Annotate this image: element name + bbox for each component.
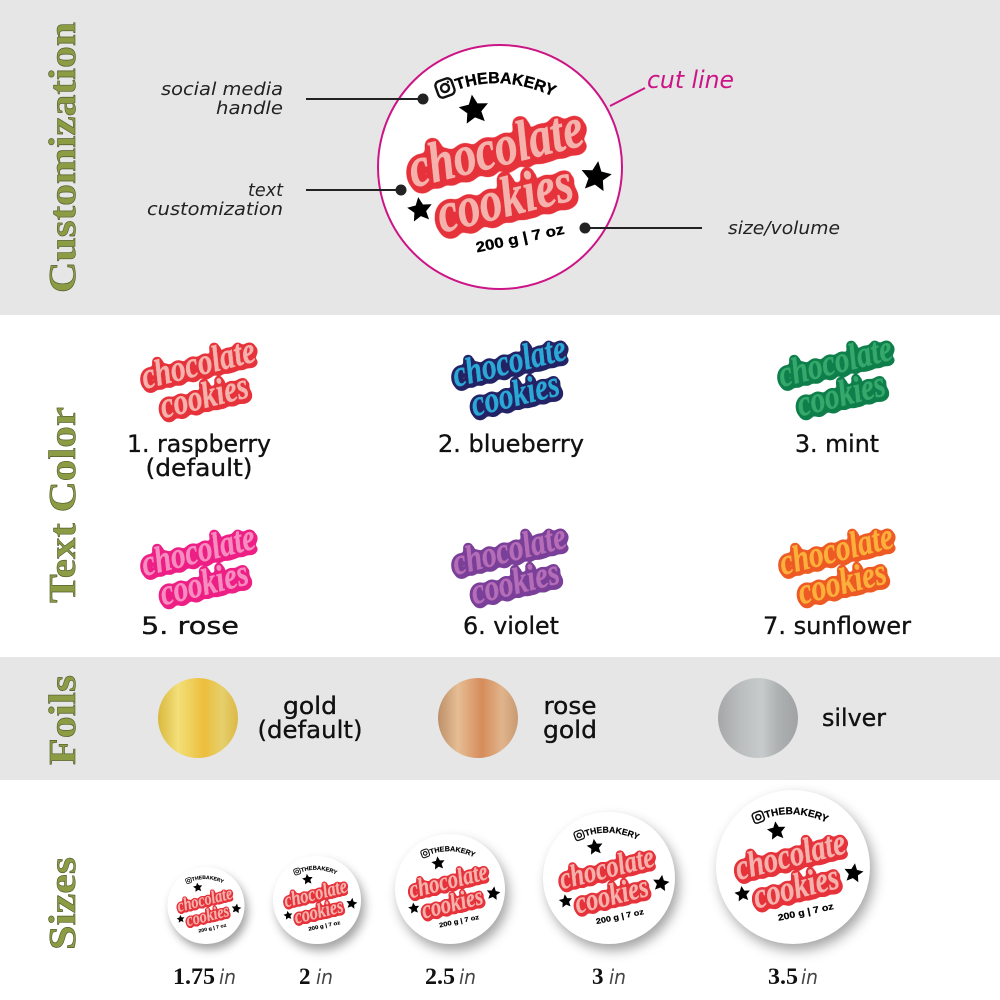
size label: 1.75 in: in (219, 965, 236, 989)
sticker: 2 in: THEBAKERY (300, 866, 338, 874)
foil: rose gold: rose (544, 692, 596, 720)
sticker: 1.75 in: 200 g | 7 oz (198, 922, 228, 933)
heading: Text Color: Text Color (42, 407, 84, 603)
callout: text customization: text (248, 181, 284, 201)
sticker: 2 in: cookies (292, 895, 346, 929)
size label: 3 in: 3 (592, 964, 604, 989)
sticker: 2.5 in (392, 834, 516, 958)
foil: gold (158, 678, 362, 758)
swatch: violet: chocolate (448, 516, 570, 584)
foil: silver (718, 678, 886, 758)
size label: 2 in (299, 964, 333, 989)
sticker: 1.75 in: cookies (184, 900, 231, 930)
sticker: 3.5 in: chocolate (731, 822, 849, 888)
swatch: violet (448, 516, 570, 640)
swatch: rose: cookies (156, 553, 253, 614)
panel: text color (42, 328, 911, 640)
swatch: sunflower (763, 516, 911, 640)
foil: rose gold: gold (543, 716, 597, 744)
callout: text customization: customization (147, 200, 283, 220)
handle text (457, 83, 554, 97)
swatch: raspberry (127, 330, 271, 482)
swatch: sunflower: cookies (794, 552, 891, 613)
sticker: 3.5 in: cookies (749, 856, 843, 916)
swatch: sunflower: chocolate (775, 516, 897, 584)
sticker: 2 in: 200 g | 7 oz (308, 920, 341, 933)
swatch: violet: 6. violet (463, 612, 559, 640)
foil: silver: silver (822, 704, 886, 732)
sticker: 2.5 in: 200 g | 7 oz (439, 914, 481, 929)
size label: 3.5 in: in (801, 965, 818, 989)
size label: 3 in (592, 964, 626, 989)
swatch: blueberry (438, 328, 584, 458)
heading: Sizes: Sizes (42, 857, 84, 950)
callout: text customization (147, 181, 406, 220)
heading: Customization: Customization (42, 22, 84, 293)
size label: 3.5 in: 3.5 (768, 964, 798, 989)
stars (406, 93, 613, 222)
size label: 3.5 in (768, 964, 818, 989)
heading: Foils: Foils (42, 675, 84, 765)
sticker: 3 in: cookies (571, 869, 652, 920)
sticker: 2.5 in: THEBAKERY (429, 846, 476, 857)
swatch: raspberry: 1. raspberry (127, 430, 271, 458)
swatch: blueberry: chocolate (448, 328, 570, 396)
callout: cut line (610, 66, 734, 106)
sticker: 3.5 in: THEBAKERY (764, 807, 830, 822)
panel: customization (0, 0, 1000, 315)
sticker: 1.75 in (165, 868, 254, 955)
label diagram: THEBAKERY (454, 72, 558, 96)
panel: sizes (42, 788, 882, 989)
sticker: 1.75 in: chocolate (175, 883, 234, 916)
sticker: 2.5 in: cookies (418, 881, 486, 924)
sticker: 1.75 in: THEBAKERY (191, 876, 224, 883)
callout: size/volume: size/volume (728, 219, 840, 239)
panel: foils (0, 657, 1000, 780)
sticker: 3 in: chocolate (556, 840, 657, 896)
product name lockup: cookies (430, 151, 579, 245)
sticker: 3 in: 200 g | 7 oz (595, 907, 645, 926)
icon: instagram (434, 77, 456, 99)
swatch: blueberry: cookies (467, 364, 564, 425)
callout: social media handle (161, 80, 428, 119)
swatch: mint (774, 328, 896, 458)
size label: 1.75 in: 1.75 (173, 964, 215, 989)
swatch: rose: 5. rose (141, 612, 239, 640)
sticker: 3.5 in (712, 788, 882, 958)
swatch: mint: cookies (793, 364, 890, 425)
product name lockup (402, 96, 590, 245)
foil: gold: (default) (258, 716, 362, 744)
size label: 2 in: 2 (299, 964, 310, 989)
swatch: mint: 3. mint (795, 430, 879, 458)
callout: social media handle: social media (161, 80, 283, 100)
swatch: raspberry: chocolate (137, 330, 259, 398)
swatch: rose: chocolate (137, 517, 259, 585)
swatch: raspberry: cookies (156, 366, 253, 427)
size label: 2.5 in: 2.5 (425, 964, 455, 989)
foil: rose gold (438, 678, 597, 758)
size label: 2.5 in: in (459, 965, 476, 989)
callout: size/volume (580, 219, 840, 239)
swatch: violet: cookies (467, 552, 564, 613)
size label: 2.5 in (425, 964, 476, 989)
callout: social media handle: handle (216, 99, 283, 119)
swatch: rose (137, 517, 259, 640)
swatch: raspberry: (default) (146, 454, 252, 482)
callout: cut line: cut line (647, 66, 734, 94)
size label: 2 in: in (316, 965, 333, 989)
size label: 1.75 in (173, 964, 236, 989)
swatch: sunflower: 7. sunflower (763, 612, 911, 640)
sticker: 2.5 in: chocolate (405, 857, 490, 904)
sticker: 2 in (270, 856, 371, 956)
volume text: 200 g | 7 oz (474, 222, 566, 256)
sticker: 3.5 in: 200 g | 7 oz (777, 901, 835, 923)
label diagram (377, 44, 623, 290)
product name lockup: chocolate (402, 96, 590, 200)
swatch: mint: chocolate (774, 328, 896, 396)
foil: gold: gold (283, 692, 337, 720)
swatch: blueberry: 2. blueberry (438, 430, 584, 458)
size label: 3 in: in (609, 965, 626, 989)
sticker: 2 in: chocolate (282, 875, 349, 912)
sticker: 3 in (540, 811, 686, 958)
sticker: 3 in: THEBAKERY (584, 826, 640, 840)
